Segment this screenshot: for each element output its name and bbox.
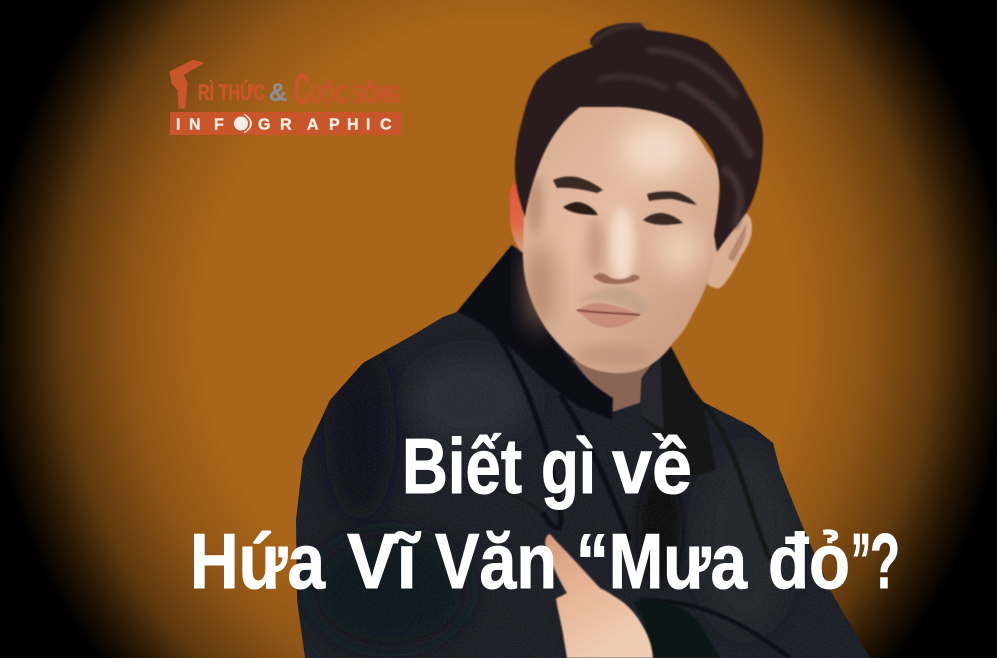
title line 2: “Mưa — [576, 517, 748, 605]
title line 2: ” — [851, 517, 871, 605]
nose shadow — [593, 274, 640, 284]
logo word uoc: UỘC — [310, 79, 347, 109]
logo wordmark first part: RÌ THỨC — [198, 80, 265, 105]
logo infographic banner — [170, 112, 402, 135]
title line 2: ? — [870, 517, 900, 605]
title — [190, 422, 900, 605]
banner ring letter O — [234, 114, 251, 132]
logo: Tri Thức & Cuộc Sống Infographic — [170, 60, 402, 135]
portrait of the actor — [280, 23, 890, 658]
hair — [515, 23, 763, 252]
title line 1: Biết — [402, 422, 522, 510]
mouth line — [577, 310, 640, 315]
right sleeve — [633, 600, 720, 658]
title line 2: Hứa — [190, 517, 326, 605]
right ear — [706, 213, 752, 288]
title line 1: gì — [541, 422, 596, 510]
left ear — [509, 183, 530, 253]
inner collar fold — [640, 358, 664, 430]
lips — [577, 303, 640, 328]
right eyebrow — [647, 191, 697, 205]
logo T mark — [170, 60, 203, 108]
face highlights and shadows — [527, 124, 702, 364]
right ear shadow — [728, 224, 746, 262]
logo word song: SỐNG — [353, 79, 400, 109]
title line 1: về — [612, 422, 692, 510]
moustache — [578, 286, 650, 314]
face — [523, 100, 720, 373]
right eye — [643, 213, 683, 225]
right collar — [640, 345, 716, 480]
hand and finger — [545, 534, 653, 658]
logo letter C: C — [294, 65, 310, 114]
neck — [573, 352, 658, 412]
title line 2: Văn — [435, 517, 557, 605]
black coat — [280, 240, 890, 658]
logo ampersand: & — [269, 79, 287, 107]
title line 2: đỏ — [768, 517, 850, 605]
banner text continued: GRAPHIC — [258, 116, 392, 134]
title line 2 — [190, 517, 900, 605]
left eye — [563, 202, 598, 215]
left eyebrow — [553, 176, 603, 193]
coat folds — [430, 327, 790, 658]
title line 1 — [402, 422, 692, 510]
title line 2: Vĩ — [347, 517, 421, 605]
hair highlights — [592, 25, 750, 225]
banner text: INF — [176, 116, 224, 134]
left collar — [457, 245, 613, 420]
